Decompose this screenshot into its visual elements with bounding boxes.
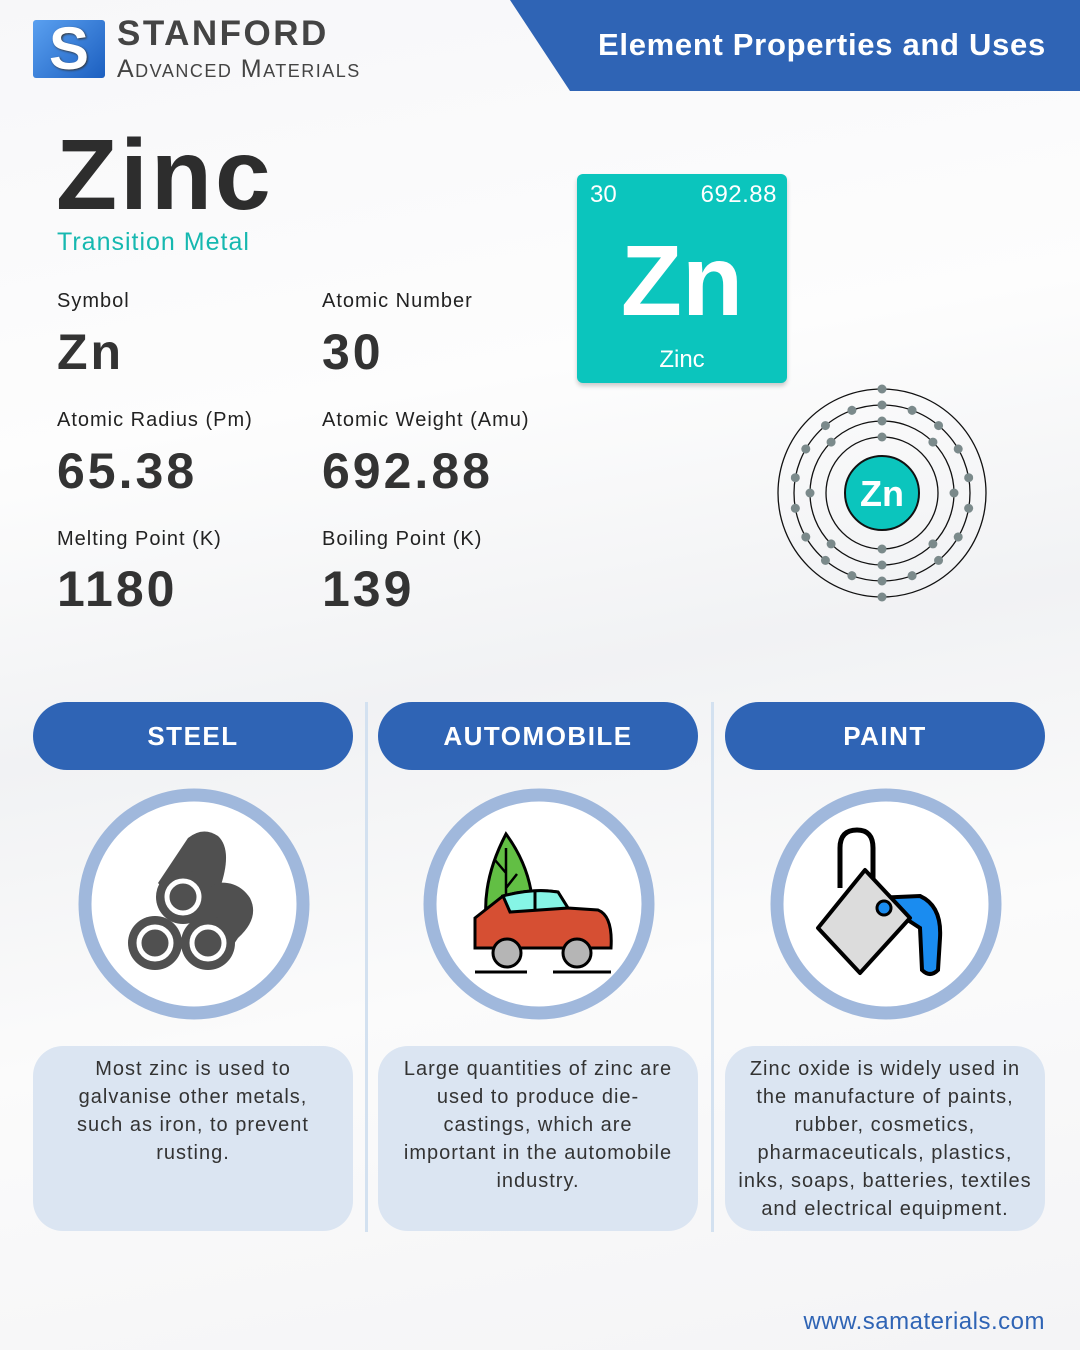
element card (577, 174, 787, 383)
element card: 692.88 (701, 181, 777, 208)
properties: 65.38 (57, 443, 197, 499)
heading: PAINT: PAINT (843, 721, 927, 751)
text: steel: such as iron, to prevent (77, 1114, 309, 1136)
properties: Symbol (57, 290, 130, 312)
icon: car (424, 788, 654, 1020)
panel: automobile (378, 702, 698, 1231)
properties: Atomic Number (322, 290, 473, 312)
properties: 1180 (57, 561, 177, 617)
heading: AUTOMOBILE: AUTOMOBILE (443, 721, 633, 751)
heading: STEEL (33, 702, 353, 770)
header title: Element Properties and Uses (598, 27, 1046, 62)
properties: Boiling Point (K) (322, 528, 482, 550)
title: Zinc: Zinc (56, 119, 274, 231)
subtitle: Transition Metal (57, 228, 250, 256)
text: automobile: important in the automobile (404, 1142, 672, 1164)
text: automobile: industry. (496, 1170, 580, 1192)
properties: 139 (322, 561, 414, 617)
logo (33, 14, 361, 83)
properties: 30 (322, 324, 384, 380)
logo: Advanced Materials (117, 55, 361, 83)
text: steel: Most zinc is used to (95, 1058, 291, 1080)
icon: paint bucket (770, 788, 1002, 1020)
text: paint: and electrical equipment. (761, 1198, 1009, 1220)
properties: Melting Point (K) (57, 528, 222, 550)
text: steel: galvanise other metals, (79, 1086, 307, 1108)
element card: Zinc (659, 346, 705, 373)
logo text: STANFORD (117, 14, 329, 53)
text: automobile: castings, which are (443, 1114, 633, 1136)
properties: Atomic Radius (Pm) (57, 409, 253, 431)
text: paint: pharmaceuticals, plastics, (758, 1142, 1012, 1164)
logo icon: S (49, 15, 89, 82)
text: paint: Zinc oxide is widely used in (750, 1058, 1020, 1080)
text: steel (33, 1046, 353, 1231)
icon: pipes (78, 788, 310, 1020)
heading: STEEL: STEEL (147, 721, 239, 751)
footer url: www.samaterials.com (803, 1308, 1045, 1335)
properties: 692.88 (322, 443, 493, 499)
text: paint: rubber, cosmetics, (795, 1114, 975, 1136)
text: automobile (378, 1046, 698, 1231)
text: automobile: used to produce die- (437, 1086, 639, 1108)
text: automobile: Large quantities of zinc are (404, 1058, 672, 1080)
properties (57, 290, 530, 617)
text: paint: inks, soaps, batteries, textiles (738, 1170, 1032, 1192)
properties: Zn (57, 324, 124, 380)
heading: PAINT (725, 702, 1045, 770)
header banner (510, 0, 1080, 91)
bohr model: Zn (860, 473, 904, 514)
text: steel: rusting. (156, 1142, 230, 1164)
element card: Zn (621, 225, 743, 337)
heading: AUTOMOBILE (378, 702, 698, 770)
logo icon (33, 20, 105, 78)
properties: Atomic Weight (Amu) (322, 409, 530, 431)
panel: paint (725, 702, 1045, 1231)
element card: 30 (590, 181, 617, 208)
text: paint: the manufacture of paints, (756, 1086, 1014, 1108)
panel: steel (33, 702, 353, 1231)
text: paint (725, 1046, 1045, 1231)
bohr model (777, 384, 987, 602)
